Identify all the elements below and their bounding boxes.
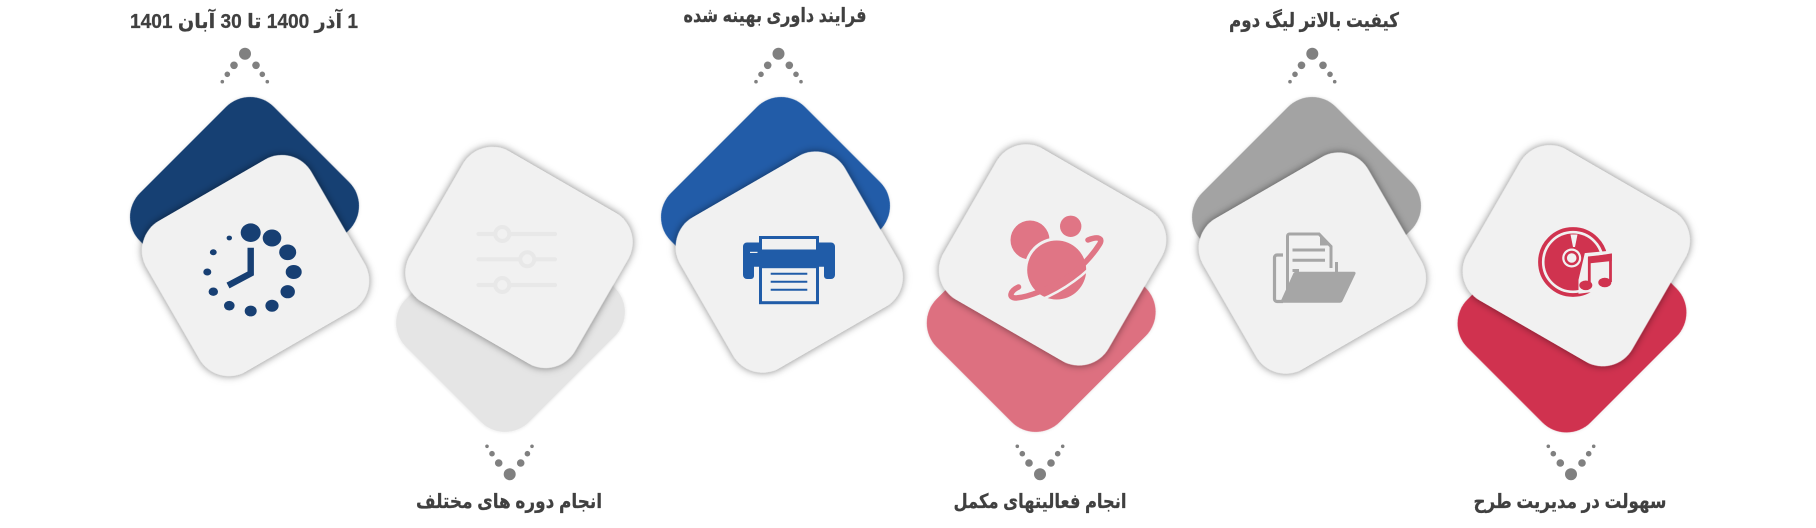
front card — [1186, 140, 1438, 386]
heading: ease of design management: سهولت در مدیریت طرح — [1474, 491, 1666, 513]
panel: optimized review — [647, 5, 915, 385]
dots pointer down — [1546, 444, 1595, 480]
front card — [927, 132, 1179, 378]
icon: printer — [743, 238, 835, 303]
icon: clock — [203, 223, 302, 316]
heading: quality: کیفیت بالاتر لیگ دوم — [1229, 8, 1399, 32]
back card blue — [647, 83, 904, 340]
back card red — [1443, 189, 1701, 447]
front card — [1450, 133, 1702, 379]
icon: music disc — [1540, 229, 1612, 295]
panel: complementary activities — [913, 132, 1179, 513]
back card navy — [116, 83, 373, 340]
back card pink — [913, 189, 1170, 446]
dots pointer up — [754, 48, 803, 83]
icon: sliders — [478, 227, 555, 292]
heading: date range: 1 آذر 1400 تا 30 آبان 1401 — [130, 8, 358, 33]
back card gray — [1178, 83, 1435, 340]
front card — [393, 135, 645, 380]
front card — [130, 143, 381, 388]
front card — [663, 139, 915, 385]
heading: complementary activities: انجام فعالیتهای مکمل — [954, 491, 1126, 513]
icon: planet — [1010, 216, 1101, 304]
panel: quality above second league — [1178, 8, 1438, 386]
panel: date range — [116, 8, 381, 388]
heading: various courses: انجام دوره های مختلف — [416, 491, 602, 513]
panel: various courses — [382, 135, 645, 513]
icon: folder with document — [1274, 234, 1356, 303]
heading: optimized review: فرایند داوری بهینه شده — [684, 5, 866, 27]
back card light — [382, 189, 639, 446]
dots pointer up — [220, 48, 269, 83]
dots pointer up — [1288, 48, 1336, 83]
panel: ease of design management — [1443, 133, 1702, 513]
dots pointer down — [1016, 444, 1064, 480]
dots pointer down — [485, 444, 534, 480]
